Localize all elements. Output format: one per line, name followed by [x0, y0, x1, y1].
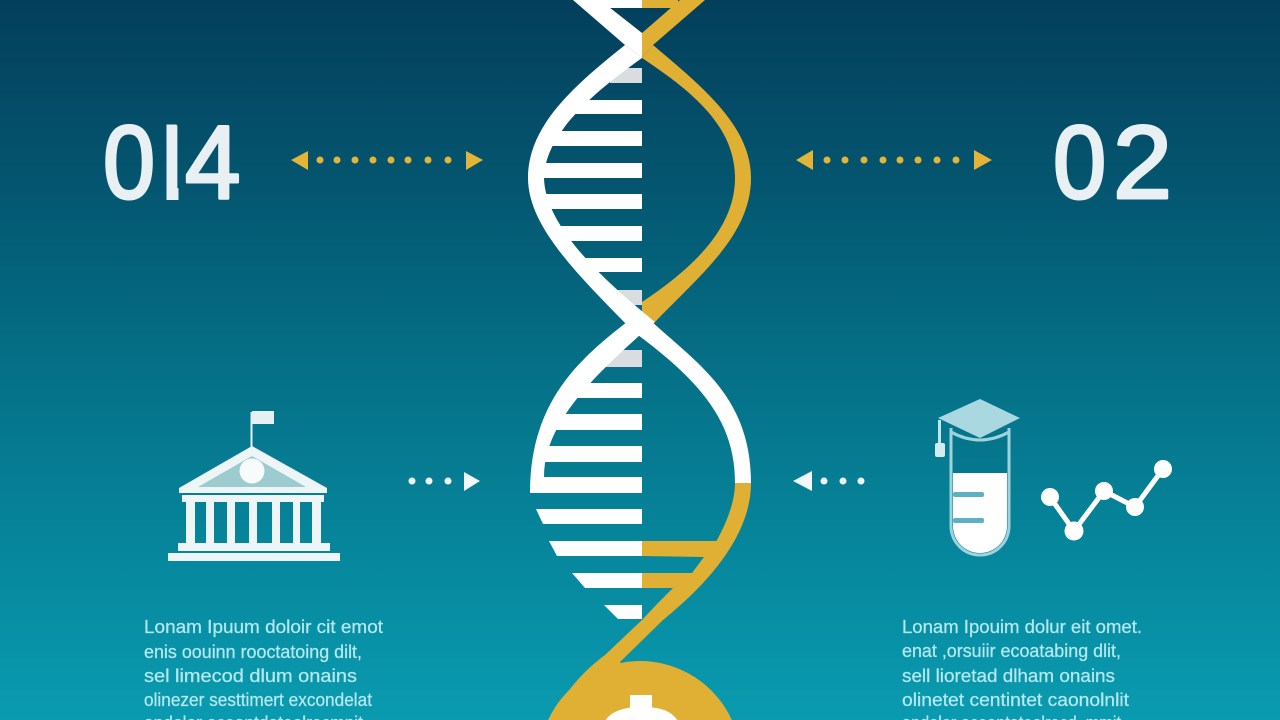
number: 014: 1 — [140, 105, 198, 221]
icon: government building — [168, 411, 340, 561]
gold strand, upper loop — [642, 0, 751, 322]
text block: left: sel limecod dlum onains — [144, 666, 357, 686]
lower helix white rungs — [535, 350, 642, 619]
DNA helix — [528, 0, 751, 720]
icon: line chart — [1041, 460, 1172, 540]
text block: left: enis oouinn rooctatoing dilt, — [144, 642, 362, 662]
icon: test tube with graduation cap — [935, 399, 1020, 555]
gold coin — [539, 661, 741, 720]
number: 02: 0 — [1053, 105, 1106, 221]
arrow: top left double-headed dotted — [291, 151, 483, 170]
arrow: bottom left dotted — [408, 472, 480, 491]
text block: right — [902, 617, 1142, 720]
text block: left — [144, 617, 383, 720]
text block: right: olinetet centintet caonolnlit — [902, 690, 1129, 710]
arrow: top right double-headed dotted — [796, 150, 992, 170]
white strand, lower left loop — [530, 322, 640, 493]
number: 014: 0 — [103, 103, 155, 220]
number: 014: 4 — [185, 104, 241, 220]
number: 02 — [1053, 105, 1172, 221]
number: 014 — [105, 124, 240, 200]
text block: right: sell lioretad dlham onains — [902, 666, 1115, 686]
top helix rungs — [540, 0, 678, 305]
text block: left: Lonam Ipuum doloir cit emot — [144, 617, 383, 637]
text block: right: enat ,orsuiir ecoatabing dlit, — [902, 641, 1121, 661]
arrow: bottom right dotted — [793, 471, 864, 491]
text block: right: Lonam Ipouim dolur eit omet. — [902, 617, 1142, 637]
number: 02: 2 — [1113, 105, 1172, 221]
white strand, upper loop — [528, 0, 655, 335]
lower helix gold rungs — [642, 541, 722, 588]
text block: left: olinezer sesttimert excondelat — [144, 690, 372, 710]
gold strand, lower section — [550, 483, 751, 720]
white strand, lower right loop — [638, 320, 751, 483]
